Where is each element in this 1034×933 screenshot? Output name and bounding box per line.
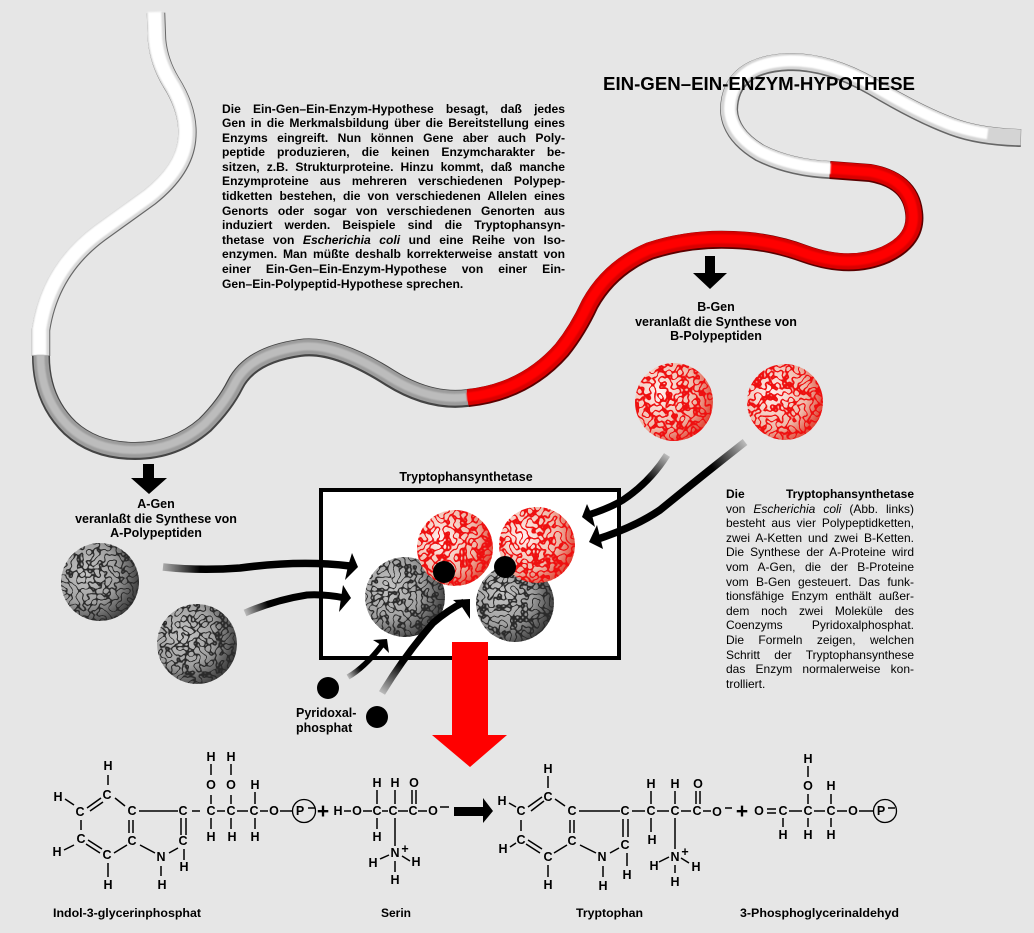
- formula: Tryptophan: H: [598, 879, 608, 893]
- B polypeptide sphere 2: [747, 364, 823, 440]
- formula: Tryptophan: O: [712, 805, 722, 819]
- formula: Indol-3-glycerinphosphat: H: [103, 878, 113, 892]
- intro text block: Gen in die Merkmalsbildung über die Bereitstellung eines: [222, 116, 565, 130]
- formula: Serin: O: [428, 804, 438, 818]
- formula: Tryptophan: H: [670, 777, 680, 791]
- formula: Tryptophan: H: [543, 762, 553, 776]
- formula: Indol-3-glycerinphosphat: C: [76, 832, 86, 846]
- formula: Tryptophan: [497, 762, 732, 893]
- formula: Indol-3-glycerinphosphat: N: [156, 850, 166, 864]
- formula: Indol-3-glycerinphosphat: O: [269, 804, 279, 818]
- side text block: Die Formeln zeigen, welchen: [726, 633, 914, 647]
- formula: Indol-3-glycerinphosphat: C: [75, 805, 85, 819]
- formula: Serin: H: [411, 855, 421, 869]
- formula: Indol-3-glycerinphosphat: C: [127, 804, 137, 818]
- intro text block: Enzymproteine aus mehreren verschiedenen Polypep-: [222, 174, 565, 188]
- intro text block: Enzyms eingreift. Nun können Gene aber auch Poly-: [222, 131, 565, 145]
- A polypeptide sphere 1: [61, 543, 139, 621]
- label: 3-Phosphoglycerinaldehyd: 3-Phosphoglycerinaldehyd: [740, 906, 899, 920]
- formula: Indol-3-glycerinphosphat: H: [52, 845, 62, 859]
- formula: Tryptophan: C: [670, 804, 680, 818]
- formula: Indol-3-glycerinphosphat: C: [249, 804, 259, 818]
- formula: 3-Phosphoglycerinaldehyd: O: [803, 779, 813, 793]
- formula: Serin: H: [390, 776, 400, 790]
- plus sign 1: +: [317, 800, 329, 823]
- label: A-Gen: veranlaßt die Synthese von: [75, 512, 237, 526]
- formula: Tryptophan: C: [516, 833, 526, 847]
- label: Indol-3-glycerinphosphat: Indol-3-glycerinphosphat: [53, 906, 201, 920]
- arrow: B sphere 2 to enzyme: [589, 442, 745, 549]
- label: Pyridoxalphosphat: Pyridoxal-: [296, 706, 356, 720]
- formula: Tryptophan: H: [691, 860, 701, 874]
- arrow: A-gene down: [131, 464, 167, 494]
- arrow: pyridoxal 2 to enzyme: [382, 599, 470, 693]
- formula: Tryptophan: H: [497, 794, 507, 808]
- intro text block: [222, 102, 565, 291]
- formula: Tryptophan: H: [498, 842, 508, 856]
- big red arrow: [432, 642, 507, 767]
- formula: Indol-3-glycerinphosphat: C: [102, 848, 112, 862]
- intro text block: thetase von Escherichia coli und eine Reihe von Iso-: [222, 233, 565, 247]
- intro text block: Genorts oder sogar von verschiedenen Genorten aus: [222, 204, 565, 218]
- formula: Tryptophan: H: [649, 859, 659, 873]
- enzyme complex: [365, 507, 575, 642]
- formula: Tryptophan: C: [567, 804, 577, 818]
- formula: Indol-3-glycerinphosphat: P: [296, 804, 304, 818]
- formula: Tryptophan: C: [543, 790, 553, 804]
- side text block: tionsfähige Enzym enthält außer-: [726, 589, 914, 603]
- label: B-Gen: veranlaßt die Synthese von: [635, 314, 797, 328]
- formula: 3-Phosphoglycerinaldehyd: C: [826, 804, 836, 818]
- intro text block: induziert werden. Beispiele sind die Tryptophansyn-: [222, 218, 565, 232]
- side text block: das Enzym normalerweise kon-: [726, 662, 914, 676]
- chain: B-gene red section: [467, 169, 914, 398]
- label: Tryptophan: Tryptophan: [576, 906, 643, 920]
- formula: Tryptophan: C: [692, 804, 702, 818]
- formula: Serin: [333, 776, 449, 887]
- formula: Indol-3-glycerinphosphat: C: [206, 804, 216, 818]
- arrow: pyridoxal 1 to enzyme: [348, 639, 389, 677]
- arrow: A sphere 2 to enzyme: [245, 585, 351, 613]
- formula: Indol-3-glycerinphosphat: H: [250, 778, 260, 792]
- intro text block: Die Ein-Gen–Ein-Enzym-Hypothese besagt, daß jedes: [222, 102, 565, 116]
- side text block: [726, 487, 914, 691]
- intro text block: sitzen, z.B. Strukturproteine. Hinzu kommt, daß manche: [222, 160, 565, 174]
- formula: Indol-3-glycerinphosphat: [52, 750, 316, 892]
- formula: Serin: H: [333, 804, 343, 818]
- formula: Serin: H: [372, 830, 382, 844]
- formula: Tryptophan: C: [620, 838, 630, 852]
- side text block: zwei A-Ketten und zwei B-Ketten.: [726, 531, 914, 545]
- formula: Serin: O: [352, 804, 362, 818]
- formula: Tryptophan: H: [543, 878, 553, 892]
- formula: Indol-3-glycerinphosphat: C: [226, 804, 236, 818]
- chain: upper right white section: [729, 61, 1021, 170]
- side text block: vom A-Gen, die der B-Proteine: [726, 560, 914, 574]
- formula: Indol-3-glycerinphosphat: H: [250, 830, 260, 844]
- formula: Indol-3-glycerinphosphat: O: [206, 778, 216, 792]
- formula: 3-Phosphoglycerinaldehyd: [754, 752, 896, 842]
- pyridoxal dot 2: [366, 706, 388, 728]
- formula: Indol-3-glycerinphosphat: H: [157, 878, 167, 892]
- formula: Tryptophan: C: [646, 804, 656, 818]
- formula: Tryptophan: N: [597, 850, 607, 864]
- side text block: dem noch zwei Moleküle des: [726, 604, 914, 618]
- label: A-Gen: A-Polypeptiden: [110, 526, 202, 540]
- formula: Tryptophan: H: [647, 833, 657, 847]
- formula: Indol-3-glycerinphosphat: C: [178, 804, 188, 818]
- chain: A-gene grey section: [40, 346, 468, 451]
- intro text block: tidketten bestehen, die von verschiedenen Allelen eines: [222, 189, 565, 203]
- formula: Indol-3-glycerinphosphat: H: [226, 750, 236, 764]
- gene chain: [40, 12, 1021, 451]
- label: Pyridoxalphosphat: phosphat: [296, 720, 352, 734]
- formula: Tryptophan: H: [670, 875, 680, 889]
- formula: 3-Phosphoglycerinaldehyd: H: [826, 828, 836, 842]
- formula: 3-Phosphoglycerinaldehyd: H: [778, 828, 788, 842]
- formula: Serin: H: [372, 776, 382, 790]
- arrow: B-gene down: [693, 256, 727, 289]
- formula: Serin: C: [408, 804, 418, 818]
- formula: Tryptophan: H: [622, 868, 632, 882]
- formula: Tryptophan: C: [567, 834, 577, 848]
- label: B-Gen: [635, 300, 797, 343]
- A polypeptide sphere 2: [157, 604, 237, 684]
- formula: 3-Phosphoglycerinaldehyd: H: [803, 752, 813, 766]
- formula: 3-Phosphoglycerinaldehyd: O: [848, 804, 858, 818]
- formula: 3-Phosphoglycerinaldehyd: C: [778, 804, 788, 818]
- formula: Indol-3-glycerinphosphat: H: [53, 790, 63, 804]
- intro text block: einer Ein-Gen–Ein-Enzym-Hypothese von einer Ein-: [222, 262, 565, 276]
- formula: Serin: H: [368, 856, 378, 870]
- side text block: trolliert.: [726, 677, 765, 691]
- formula: Serin: O: [409, 776, 419, 790]
- formula: Tryptophan: N: [670, 850, 680, 864]
- label: Serin: Serin: [381, 906, 411, 920]
- formula: Indol-3-glycerinphosphat: C: [102, 788, 112, 802]
- formula: Serin: N: [390, 846, 400, 860]
- side text block: Schritt der Tryptophansynthese: [726, 648, 914, 662]
- label: B-Gen: B-Gen: [697, 300, 735, 314]
- arrow: A sphere 1 to enzyme: [163, 553, 358, 580]
- label: B-Gen: B-Polypeptiden: [670, 329, 762, 343]
- intro text block: peptide produzieren, die keinen Enzymcharakter be-: [222, 145, 565, 159]
- formula: Tryptophan: H: [646, 777, 656, 791]
- formula: Indol-3-glycerinphosphat: C: [178, 834, 188, 848]
- formula: Indol-3-glycerinphosphat: H: [179, 860, 189, 874]
- formula: Indol-3-glycerinphosphat: O: [226, 778, 236, 792]
- pyridoxal dot 1: [317, 677, 339, 699]
- label: Pyridoxalphosphat: [296, 706, 356, 734]
- formula: Tryptophan: C: [620, 804, 630, 818]
- side text block: Die Tryptophansynthetase: [726, 487, 914, 501]
- formula: Indol-3-glycerinphosphat: H: [103, 759, 113, 773]
- label: Tryptophansynthetase: Tryptophansynthetase: [399, 470, 533, 484]
- plus sign 2: +: [736, 800, 748, 823]
- chain: upper left white section: [40, 12, 187, 356]
- title: EIN-GEN–EIN-ENZYM-HYPOTHESE: [603, 74, 915, 94]
- side text block: von Escherichia coli (Abb. links): [726, 502, 914, 516]
- formula: Indol-3-glycerinphosphat: H: [206, 750, 216, 764]
- formula: 3-Phosphoglycerinaldehyd: O: [754, 804, 764, 818]
- formula: Tryptophan: C: [516, 804, 526, 818]
- formula: 3-Phosphoglycerinaldehyd: C: [803, 804, 813, 818]
- reaction arrow: [454, 798, 493, 823]
- label: A-Gen: A-Gen: [137, 497, 175, 511]
- formula: Indol-3-glycerinphosphat: H: [227, 830, 237, 844]
- formula: 3-Phosphoglycerinaldehyd: H: [803, 828, 813, 842]
- intro text block: enzymen. Man müßte deshalb korrekterweise anstatt von: [222, 247, 565, 261]
- enzyme box: [321, 490, 619, 658]
- formula: Indol-3-glycerinphosphat: H: [206, 830, 216, 844]
- formula: Serin: +: [401, 842, 409, 856]
- side text block: Die Synthese der A-Proteine wird: [726, 545, 914, 559]
- formula: Tryptophan: C: [543, 850, 553, 864]
- formula: Serin: C: [372, 804, 382, 818]
- B polypeptide sphere 1: [635, 363, 713, 441]
- label: A-Gen: [75, 497, 237, 540]
- formula: Tryptophan: +: [681, 845, 689, 859]
- formula: Serin: H: [390, 873, 400, 887]
- formula: 3-Phosphoglycerinaldehyd: H: [826, 779, 836, 793]
- side text block: vom B-Gen gesteuert. Das funk-: [726, 575, 914, 589]
- side text block: besteht aus vier Polypeptidketten,: [726, 516, 914, 530]
- arrow: B sphere 1 to enzyme: [582, 455, 667, 527]
- formula: Indol-3-glycerinphosphat: C: [127, 834, 137, 848]
- formula: Tryptophan: O: [693, 777, 703, 791]
- formula: Serin: C: [388, 804, 398, 818]
- side text block: Coenzyms Pyridoxalphosphat.: [726, 618, 914, 632]
- formula: 3-Phosphoglycerinaldehyd: P: [877, 804, 885, 818]
- intro text block: Gen–Ein-Polypeptid-Hypothese sprechen.: [222, 277, 463, 291]
